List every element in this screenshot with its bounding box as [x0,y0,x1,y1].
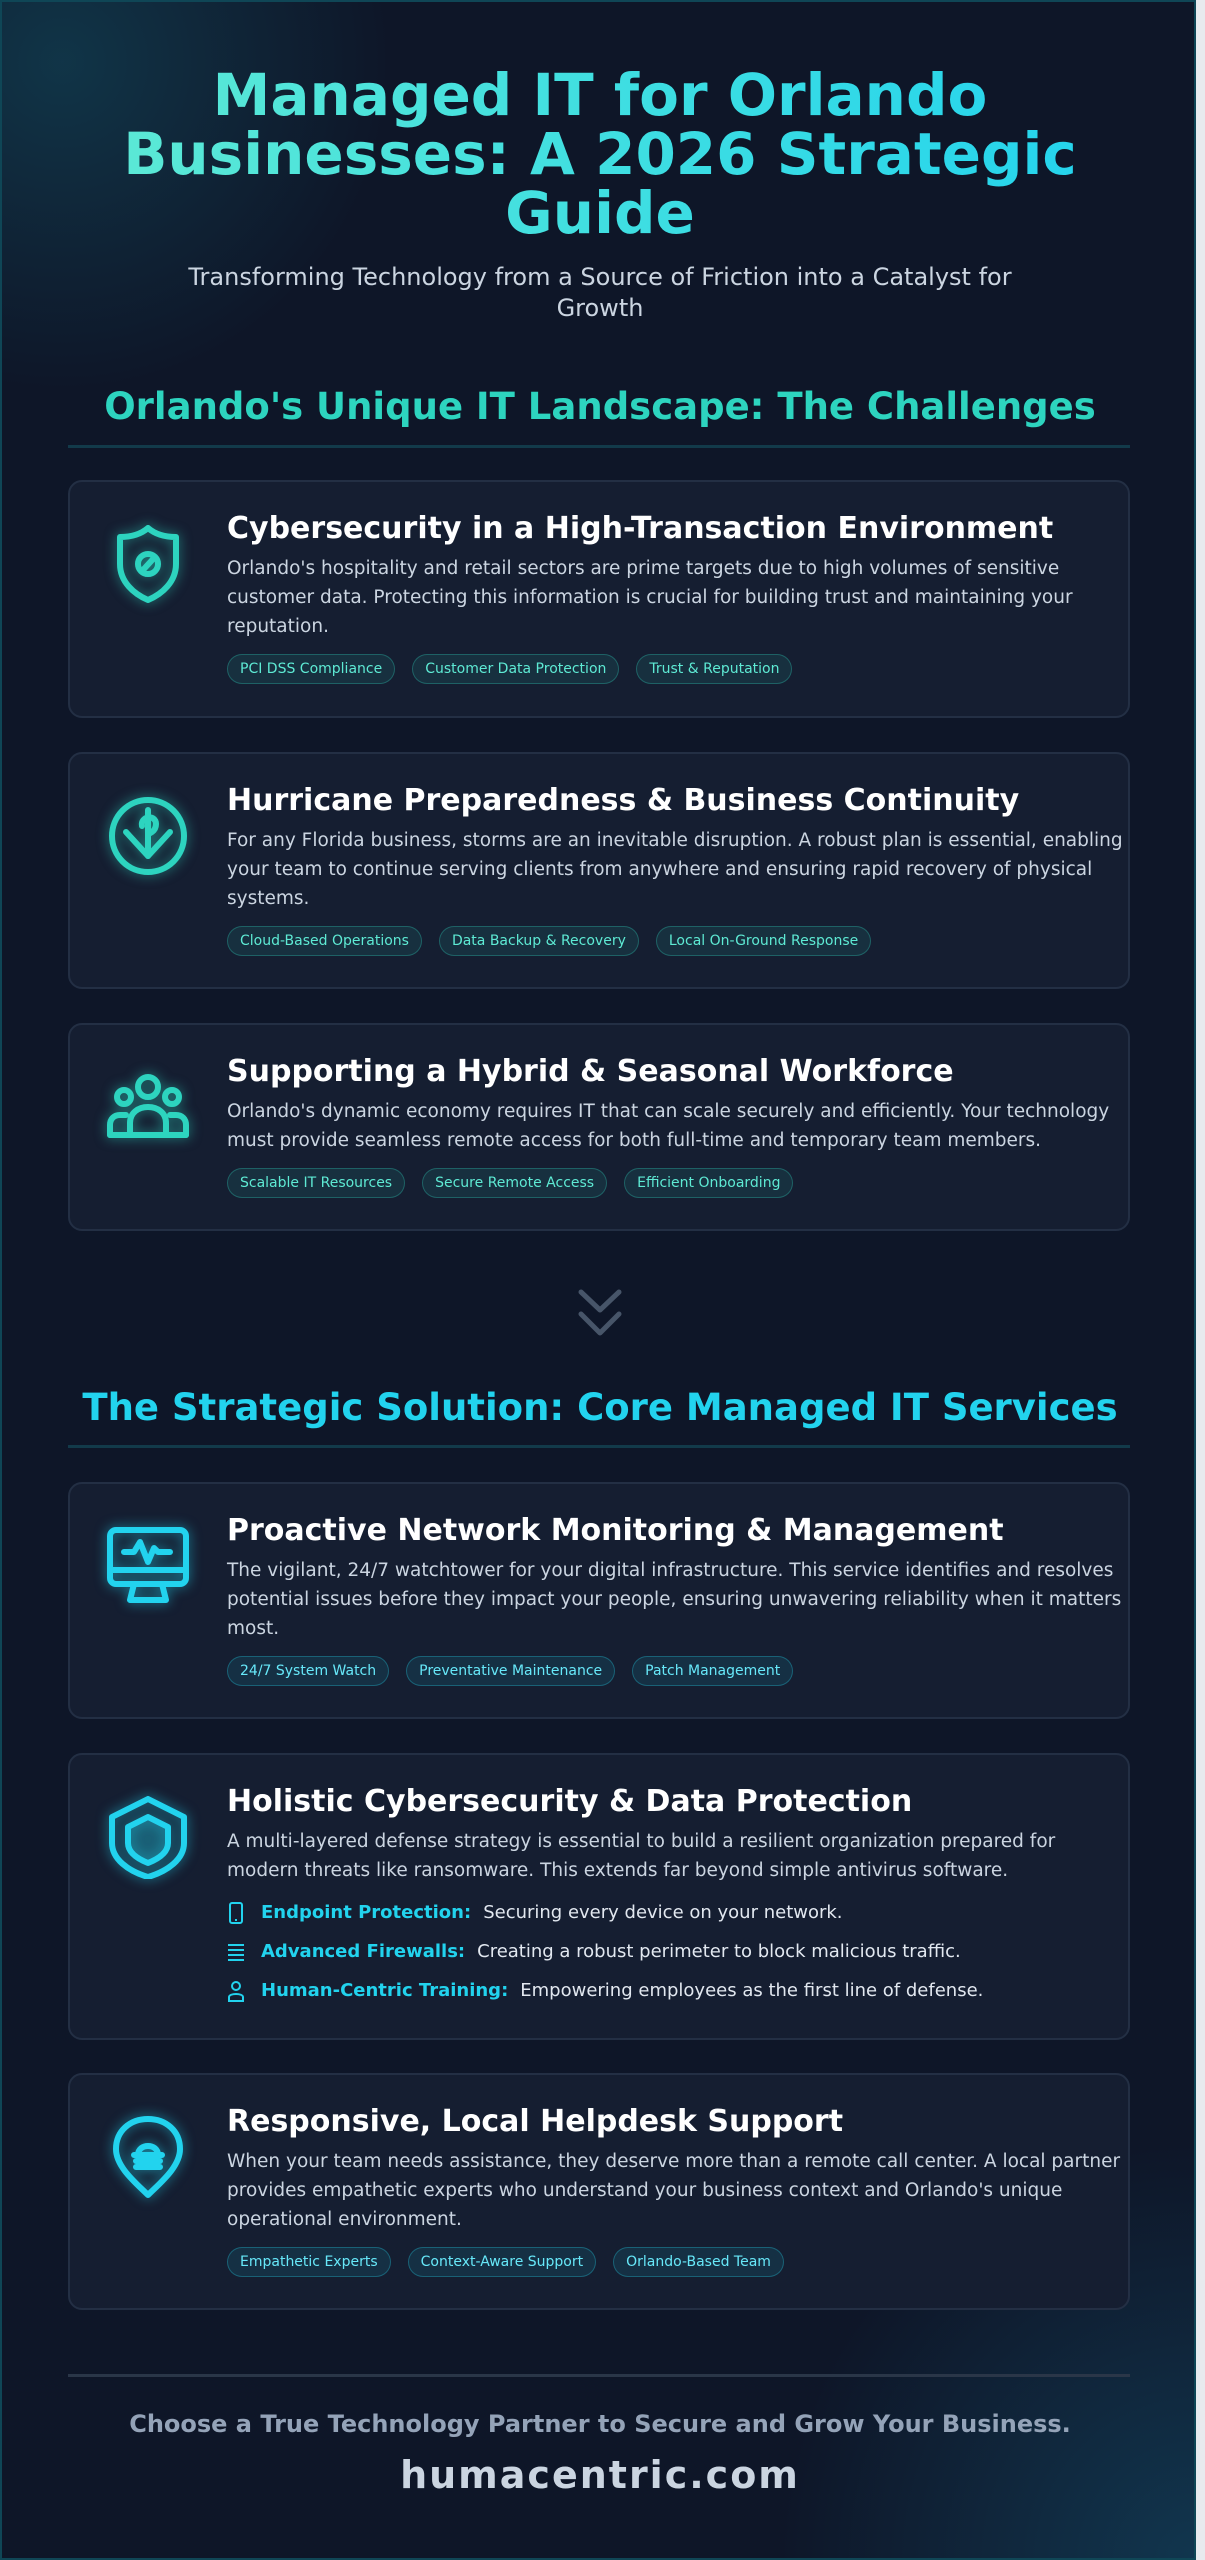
heading: Responsive, Local Helpdesk Support [227,2104,843,2139]
panel: holistic cybersecurity [68,1753,1130,2040]
section heading: solutions: The Strategic Solution: Core Managed IT Services [82,1386,1118,1429]
tags: Orlando-Based Team [626,2254,771,2270]
bullet: firewalls: Advanced Firewalls: [261,1941,465,1962]
text: most. [227,1618,279,1639]
bullet: firewalls: Creating a robust perimeter to block malicious traffic. [477,1941,961,1962]
icon: double shield [101,1790,195,1886]
bullet list [228,1902,983,2002]
tags: 24/7 System Watch [240,1663,376,1679]
panel: helpdesk support [68,2073,1130,2310]
text: Orlando's dynamic economy requires IT that can scale securely and efficiently. Your technology [227,1101,1109,1122]
subtitle: Transforming Technology from a Source of Friction into a Catalyst for Growth [188,263,1012,322]
panel: hurricane preparedness [68,752,1130,989]
tags: Empathetic Experts [240,2254,378,2270]
tags: Data Backup & Recovery [452,933,626,949]
bullet: firewalls [228,1941,961,1962]
text [227,2151,1120,2230]
bullet: endpoint: Securing every device on your network. [483,1902,843,1923]
heading: Holistic Cybersecurity & Data Protection [227,1784,912,1819]
bullet: training: Empowering employees as the first line of defense. [520,1980,983,2001]
tags: PCI DSS Compliance [240,661,382,677]
tags [227,2247,784,2277]
tags: Secure Remote Access [435,1175,594,1191]
text [227,830,1123,909]
text: Orlando's hospitality and retail sectors are prime targets due to high volumes of sensitive [227,558,1059,579]
heading: Proactive Network Monitoring & Management [227,1513,1004,1548]
arrow: double chevron [578,1290,622,1336]
text: modern threats like ransomware. This extends far beyond simple antivirus software. [227,1860,1008,1881]
text: customer data. Protecting this information is crucial for building trust and maintaining your [227,587,1073,608]
tags: Efficient Onboarding [637,1175,780,1191]
text [227,558,1073,637]
tags [227,1656,793,1686]
tags: Patch Management [645,1663,780,1679]
text [227,1831,1056,1881]
text: A multi-layered defense strategy is essential to build a resilient organization prepared for [227,1831,1055,1852]
tags: Trust & Reputation [649,661,779,677]
footer tagline: Choose a True Technology Partner to Secure and Grow Your Business. [129,2410,1071,2438]
bullet: endpoint [229,1902,843,1924]
bullet: endpoint: Endpoint Protection: [261,1902,471,1923]
title: Managed IT for Orlando Businesses: A 2026 Strategic Guide [123,61,1077,247]
heading: Supporting a Hybrid & Seasonal Workforce [227,1054,954,1089]
panel: cybersecurity challenge [68,480,1130,718]
text: The vigilant, 24/7 watchtower for your digital infrastructure. This service identifies and resolves [227,1560,1113,1581]
icon: location pin [106,2108,190,2204]
text: When your team needs assistance, they deserve more than a remote call center. A local partner [227,2151,1120,2172]
text: provides empathetic experts who understand your business context and Orlando's unique [227,2180,1062,2201]
icon: shield [109,519,187,610]
heading: Hurricane Preparedness & Business Continuity [227,783,1019,818]
text: systems. [227,888,309,909]
tags: Local On-Ground Response [669,933,858,949]
tags [227,1168,793,1198]
text: potential issues before they impact your people, ensuring unwavering reliability when it matters [227,1589,1121,1610]
text: reputation. [227,616,329,637]
tags: Context-Aware Support [421,2254,583,2270]
icon: people group [100,1067,196,1146]
text [227,1101,1109,1151]
section heading: challenges: Orlando's Unique IT Landscape: The Challenges [104,385,1096,428]
text: must provide seamless remote access for both full-time and temporary team members. [227,1130,1041,1151]
bullet: training: Human-Centric Training: [261,1980,508,2001]
icon: circle arrow [102,790,194,882]
tags [227,926,871,956]
text: operational environment. [227,2209,462,2230]
tags: Preventative Maintenance [419,1663,602,1679]
tags: Customer Data Protection [425,661,606,677]
icon: monitor [99,1519,197,1611]
text: For any Florida business, storms are an inevitable disruption. A robust plan is essential, enabling [227,830,1123,851]
tags [227,654,792,684]
tags: Cloud-Based Operations [240,933,409,949]
heading: Cybersecurity in a High-Transaction Environment [227,511,1053,546]
panel: hybrid workforce [68,1023,1130,1231]
bullet: training [228,1980,983,2002]
panel: network monitoring [68,1482,1130,1719]
tags: Scalable IT Resources [240,1175,392,1191]
text: your team to continue serving clients from anywhere and ensuring rapid recovery of physical [227,859,1092,880]
footer domain: humacentric.com [400,2453,800,2497]
text [226,1560,1121,1639]
